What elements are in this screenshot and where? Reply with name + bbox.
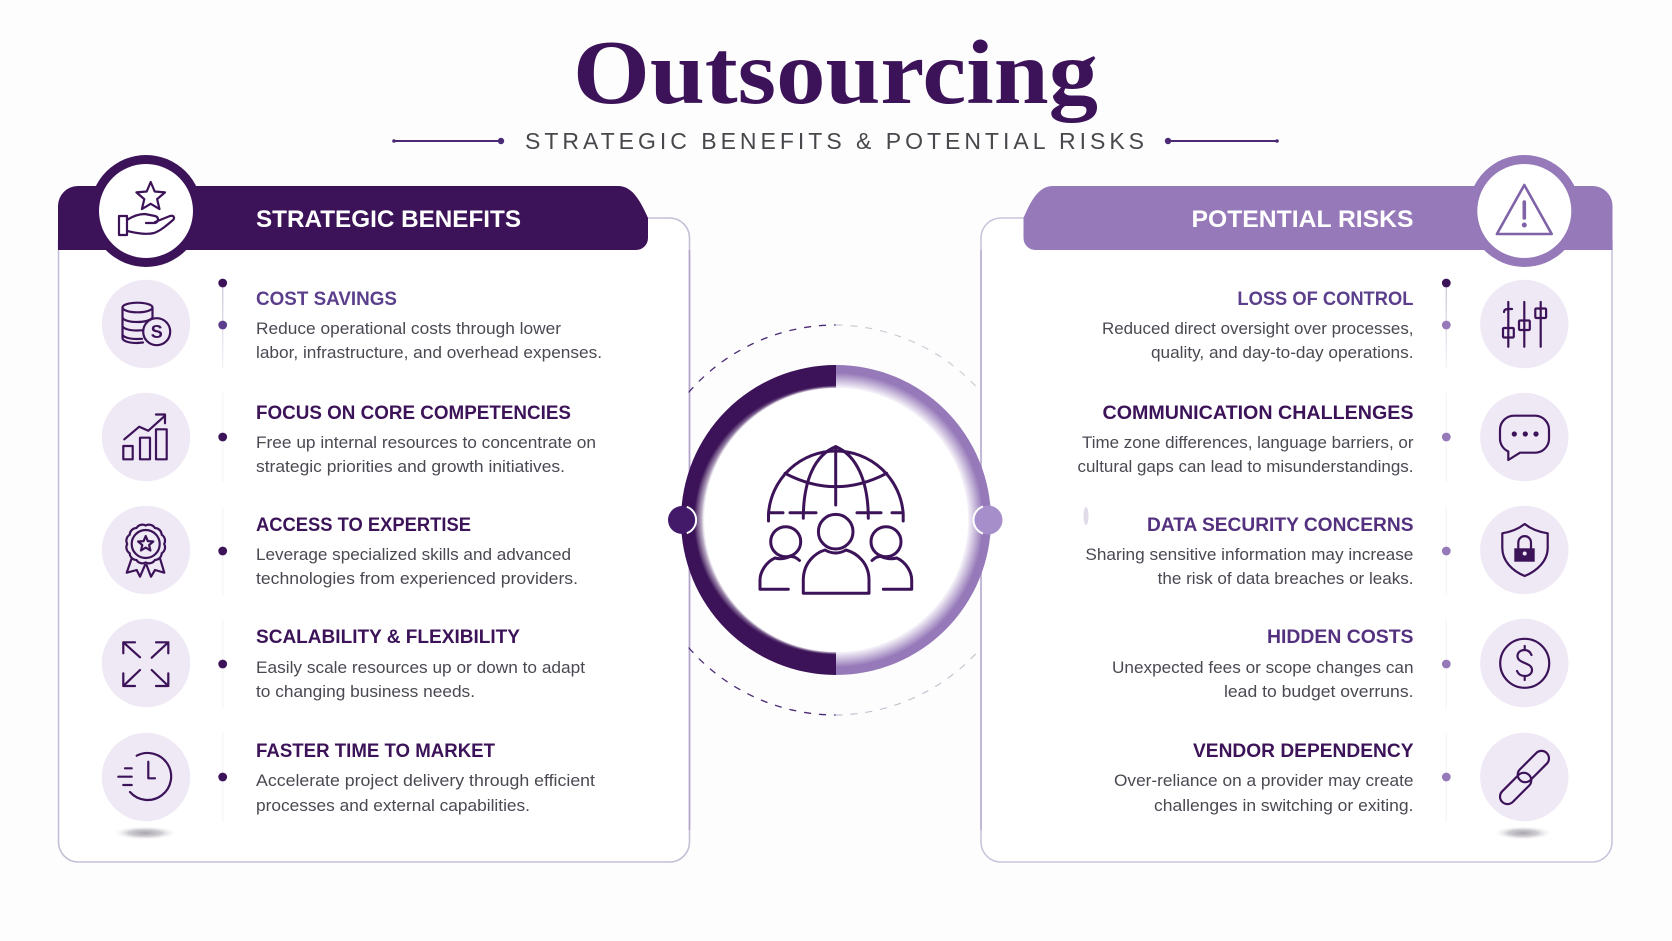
node right — [974, 506, 1002, 534]
icon: award badge — [126, 525, 165, 577]
subtitle with flanking lines — [392, 128, 1279, 154]
card outline — [58, 218, 690, 862]
heading: STRATEGIC BENEFITS — [256, 206, 521, 233]
banner — [58, 186, 648, 250]
item: loss of control — [1102, 279, 1569, 368]
item: focus on core competencies: FOCUS ON CORE COMPETENCIES — [256, 403, 571, 424]
ring: right half — [836, 365, 991, 675]
icon: expand arrows — [123, 642, 168, 686]
item: communication challenges: cultural gaps can lead to misunderstandings. — [1078, 457, 1414, 476]
heading: POTENTIAL RISKS — [1192, 206, 1414, 233]
ring: left half — [681, 365, 836, 675]
item: loss of control: quality, and day-to-day operations. — [1151, 343, 1414, 362]
dashed orbit — [689, 325, 981, 715]
item: scalability and flexibility: to changing business needs. — [256, 682, 475, 701]
subtitle with flanking lines: STRATEGIC BENEFITS & POTENTIAL RISKS — [525, 128, 1144, 154]
title: Outsourcing — [573, 22, 1098, 123]
icon: chain link — [1495, 748, 1554, 807]
node left — [668, 506, 696, 534]
item: scalability and flexibility: Easily scale resources up or down to adapt — [256, 658, 585, 677]
item: access to expertise: ACCESS TO EXPERTISE — [256, 515, 471, 536]
icon: hand with star — [90, 155, 202, 267]
item: data security concerns: the risk of data breaches or leaks. — [1158, 569, 1414, 588]
icon: clock — [118, 753, 171, 800]
item: hidden costs: lead to budget overruns. — [1224, 682, 1414, 701]
item: focus on core competencies — [102, 393, 596, 482]
item: vendor dependency — [1114, 733, 1569, 822]
item: communication challenges: Time zone differences, language barriers, or — [1082, 433, 1414, 452]
item: cost savings: COST SAVINGS — [256, 289, 397, 310]
icon shadow — [1493, 826, 1553, 840]
icon: growth chart — [123, 414, 167, 459]
item: vendor dependency: challenges in switching or exiting. — [1154, 796, 1414, 815]
item: hidden costs: Unexpected fees or scope changes can — [1112, 658, 1414, 677]
icon shadow — [112, 826, 178, 840]
item: loss of control: Reduced direct oversight over processes, — [1102, 319, 1414, 338]
card outline — [981, 218, 1612, 862]
item: scalability and flexibility — [102, 619, 585, 708]
item: access to expertise: technologies from experienced providers. — [256, 569, 578, 588]
icon: coins: S — [151, 322, 163, 342]
item: vendor dependency: Over-reliance on a provider may create — [1114, 771, 1414, 790]
item: scalability and flexibility: SCALABILITY & FLEXIBILITY — [256, 627, 520, 648]
icon: coins — [122, 303, 170, 345]
item: cost savings: Reduce operational costs through lower — [256, 319, 561, 338]
item: data security concerns — [1085, 506, 1569, 595]
item: faster time to market: FASTER TIME TO MARKET — [256, 741, 495, 762]
ring: left half inner fade — [681, 365, 836, 675]
icon: warning triangle — [1468, 155, 1580, 267]
item: access to expertise — [102, 506, 578, 595]
stray smudge — [1084, 507, 1088, 525]
item: access to expertise: Leverage specialized skills and advanced — [256, 545, 571, 564]
central ring graphic — [668, 325, 1002, 715]
panel: potential risks — [981, 155, 1612, 862]
item: faster time to market: Accelerate project delivery through efficient — [256, 771, 595, 790]
item: cost savings — [102, 279, 602, 368]
item: faster time to market: processes and external capabilities. — [256, 796, 530, 815]
item: communication challenges — [1078, 393, 1569, 482]
icon: dollar coin — [1500, 639, 1549, 688]
item: loss of control: LOSS OF CONTROL — [1237, 289, 1414, 310]
item: hidden costs — [1112, 619, 1569, 708]
banner — [1024, 186, 1612, 250]
item: faster time to market — [102, 733, 595, 822]
icon: shield with lock — [1502, 524, 1548, 576]
item: cost savings: labor, infrastructure, and overhead expenses. — [256, 343, 602, 362]
item: focus on core competencies: strategic priorities and growth initiatives. — [256, 457, 565, 476]
item: data security concerns: DATA SECURITY CONCERNS — [1147, 515, 1414, 536]
item: focus on core competencies: Free up internal resources to concentrate on — [256, 433, 596, 452]
item: data security concerns: Sharing sensitive information may increase — [1085, 545, 1413, 564]
icon: globe with people — [760, 447, 912, 593]
panel: strategic benefits — [58, 155, 690, 862]
item: hidden costs: HIDDEN COSTS — [1267, 627, 1414, 648]
icon: sliders — [1503, 302, 1546, 347]
item: vendor dependency: VENDOR DEPENDENCY — [1193, 741, 1414, 762]
item: communication challenges: COMMUNICATION CHALLENGES — [1102, 403, 1414, 424]
icon: chat bubble — [1500, 416, 1549, 460]
